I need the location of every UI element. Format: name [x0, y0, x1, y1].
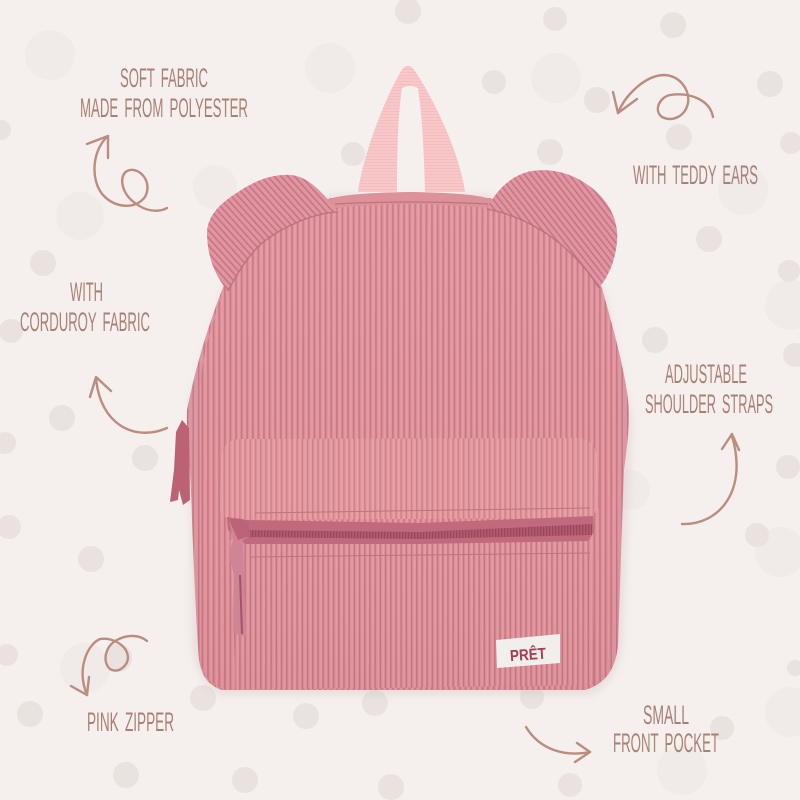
- upper front pocket: [220, 438, 599, 520]
- infographic canvas: MADE FROM POLYESTER: [80, 93, 248, 123]
- arrow: shoulder straps: [682, 434, 739, 524]
- brand label: PRÊT: [509, 644, 547, 665]
- right ear: [487, 170, 617, 288]
- brand label: [496, 634, 560, 668]
- text: soft fabric made from polyester: [80, 63, 248, 123]
- arrow: soft fabric: [87, 136, 167, 211]
- front zipper: [227, 516, 594, 544]
- backpack shadow: [190, 195, 632, 695]
- text: pink zipper: PINK ZIPPER: [87, 707, 174, 737]
- side zipper pull: [170, 420, 190, 505]
- arrow: teddy ears: [613, 75, 713, 119]
- main body: [187, 192, 629, 690]
- lower front pocket: [230, 540, 594, 690]
- text: with corduroy fabric: [20, 277, 150, 337]
- front zipper pull: [229, 518, 250, 636]
- arrow: pink zipper: [71, 636, 147, 695]
- text: adjustable shoulder straps: [645, 359, 773, 419]
- text: small front pocket: [613, 700, 719, 758]
- text: soft fabric made from polyester: SOFT FABRIC: [120, 63, 208, 93]
- backpack: [170, 66, 629, 690]
- infographic canvas: CORDUROY FABRIC: [20, 307, 150, 337]
- top handle: [358, 66, 465, 192]
- arrow: front pocket: [526, 727, 590, 762]
- text: small front pocket: SMALL: [643, 700, 689, 730]
- text: with corduroy fabric: WITH: [70, 277, 103, 307]
- left ear: [207, 175, 338, 291]
- arrow: corduroy fabric: [90, 377, 167, 433]
